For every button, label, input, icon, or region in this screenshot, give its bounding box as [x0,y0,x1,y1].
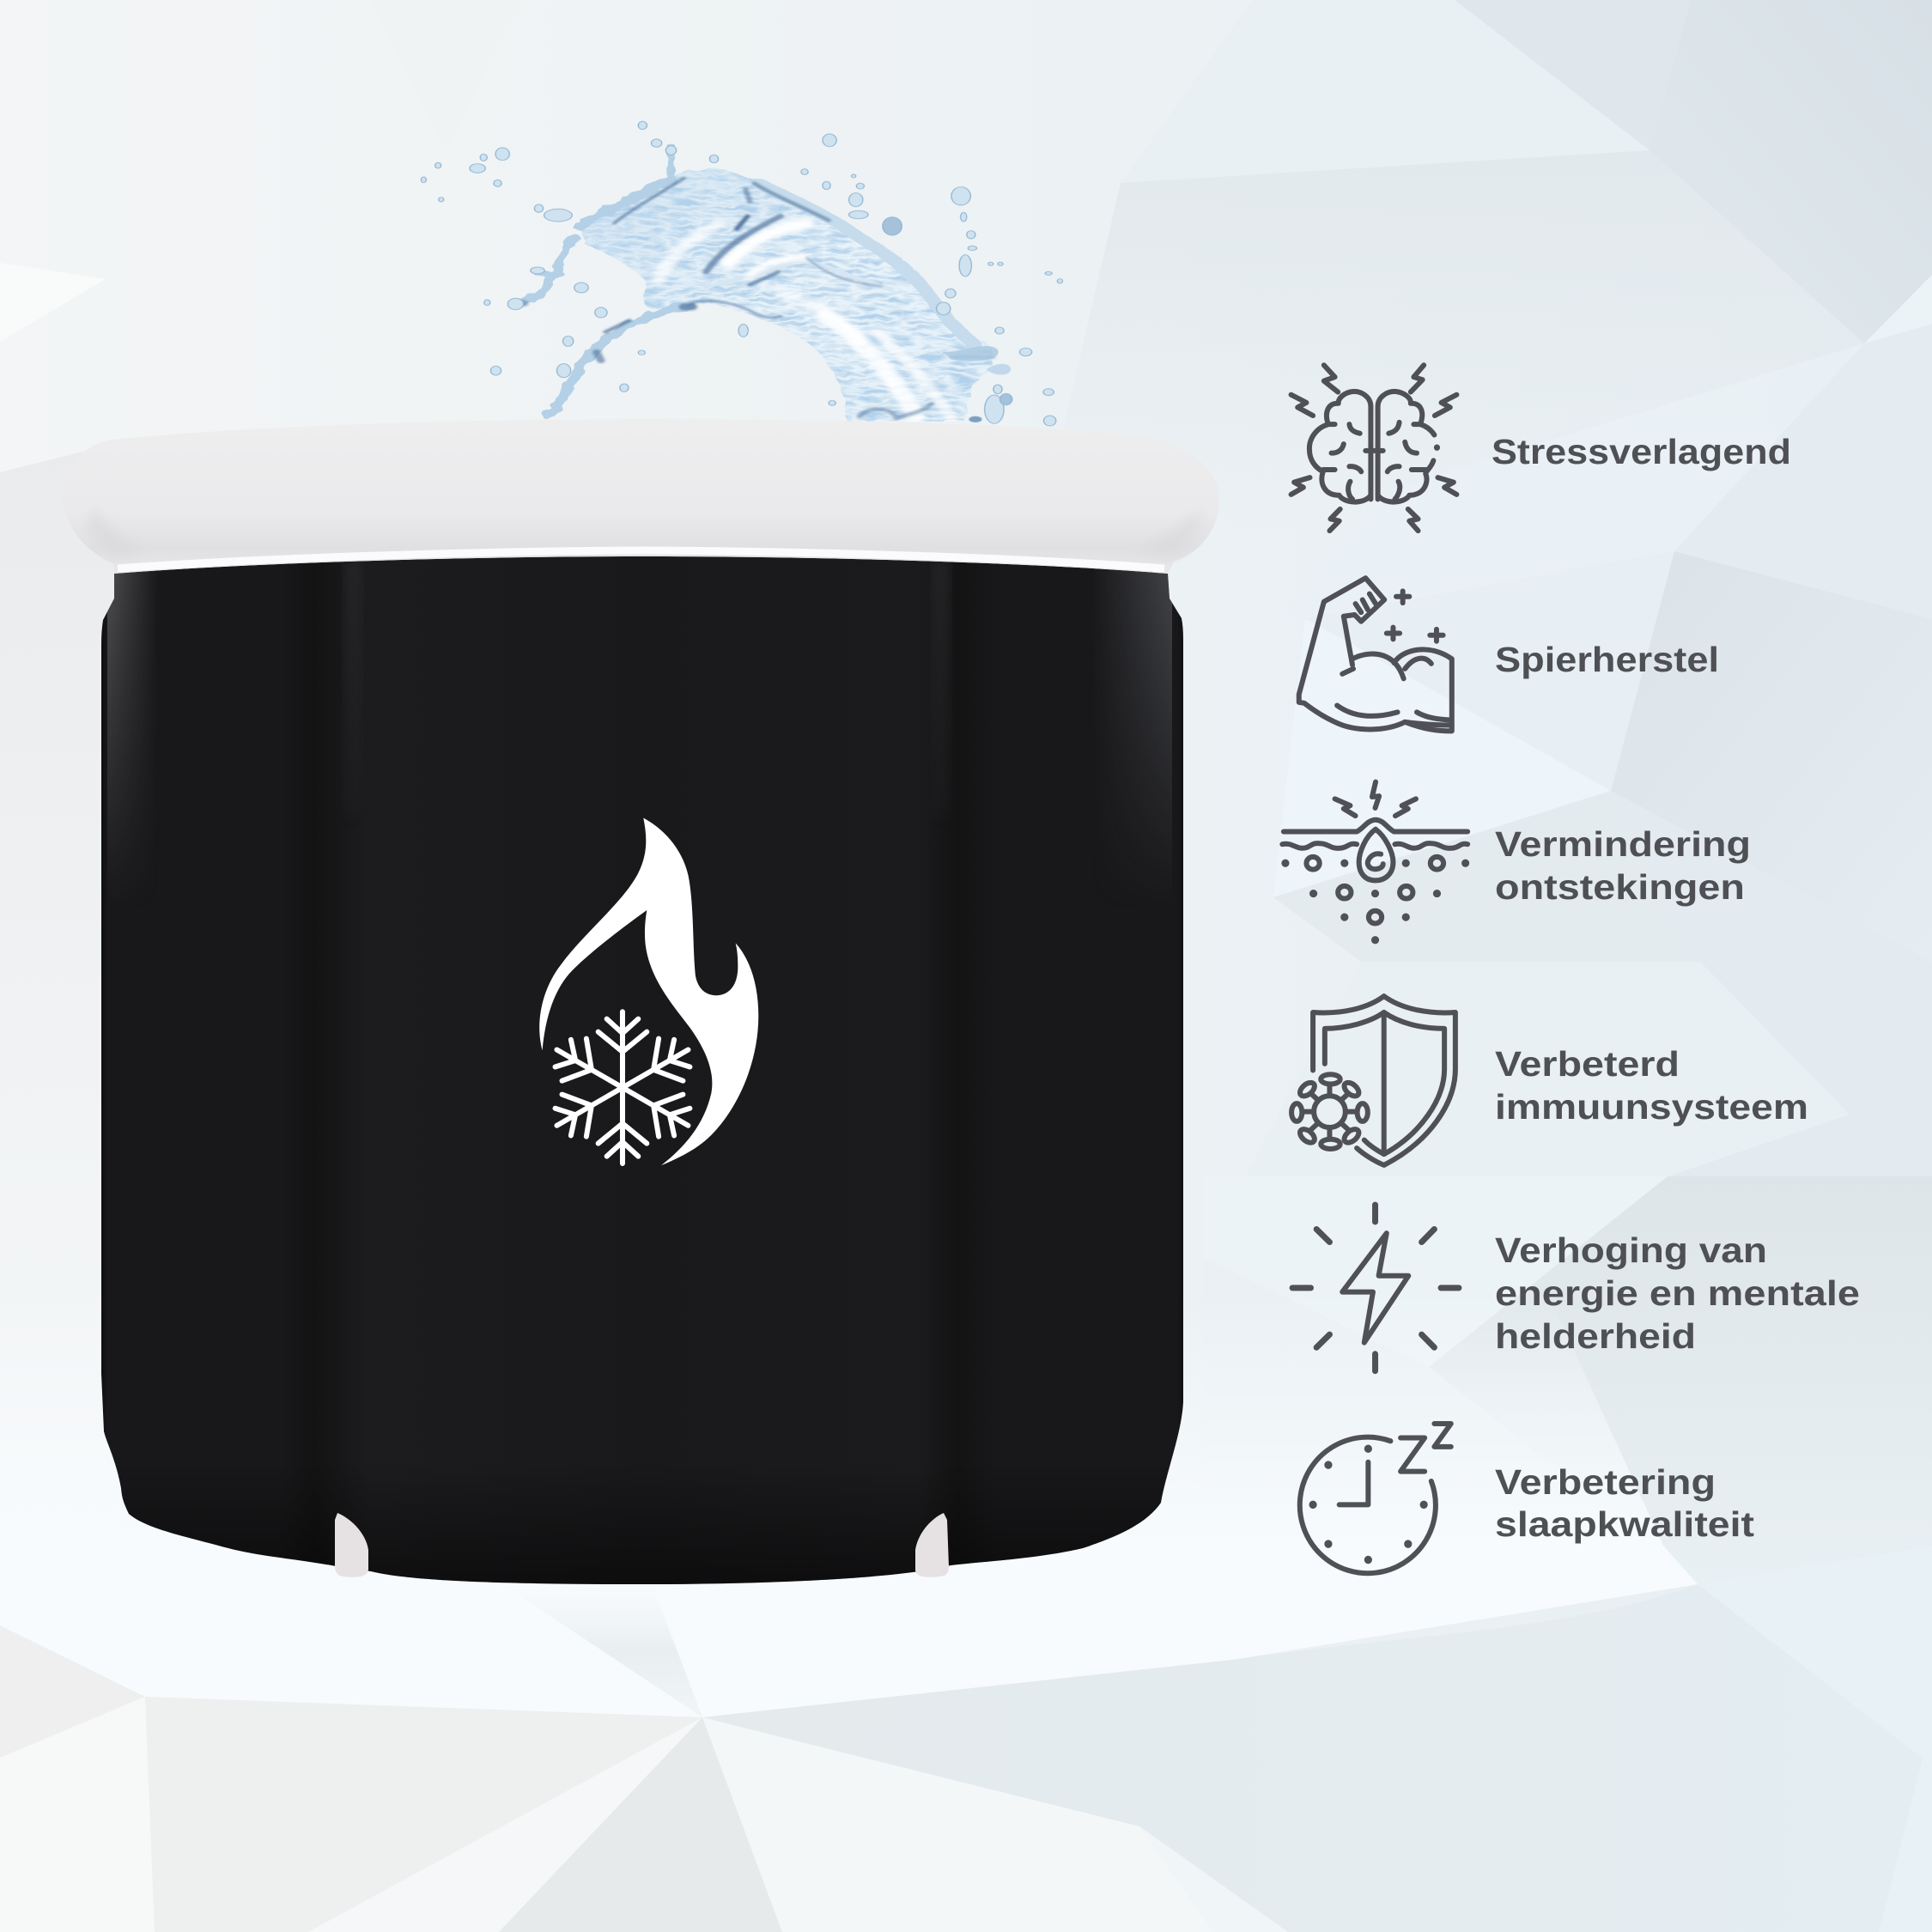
label: Stressverlagend [1492,432,1791,471]
label: Vermindering [1495,824,1751,864]
water splash [421,121,1062,426]
snowflake [544,1012,701,1163]
icon: clock with zzz [1300,1424,1451,1573]
icon: flexed arm [1299,578,1452,731]
benefit: Spierherstel [1299,578,1719,731]
label: Verbeterd [1495,1044,1680,1084]
label: slaapkwaliteit [1495,1504,1754,1544]
product: ice bath tub [63,419,1219,1589]
label: Verbetering [1495,1462,1716,1502]
icon: lightning bolt with rays [1292,1205,1459,1371]
tub feet [335,1513,949,1577]
tub body [94,550,1194,1589]
benefit: Vermindering ontstekingen [1281,782,1751,944]
benefit: Verbeterd immuunsysteem [1291,996,1808,1165]
icon: brain with lightning bolts [1291,365,1456,531]
label: Spierherstel [1495,640,1719,679]
label: energie en mentale [1495,1273,1860,1313]
splash body [515,146,1011,421]
label [1495,824,1751,907]
label: Verhoging van [1495,1230,1767,1270]
benefit: Verbetering slaapkwaliteit [1300,1424,1754,1573]
benefit: Verhoging van energie en mentale helderheid [1292,1205,1860,1371]
tub inflatable rim [63,419,1219,574]
icon: skin inflammation [1281,782,1469,944]
label [1495,1462,1754,1544]
label [1495,1230,1860,1356]
icon: shield with virus [1291,996,1455,1165]
water droplets [421,121,1062,426]
label [1495,1044,1808,1127]
logo: flame with snowflake [539,818,758,1165]
label: immuunsysteem [1495,1087,1808,1127]
label: helderheid [1495,1316,1696,1356]
label: ontstekingen [1495,867,1745,907]
benefit: Stressverlagend [1291,365,1791,531]
